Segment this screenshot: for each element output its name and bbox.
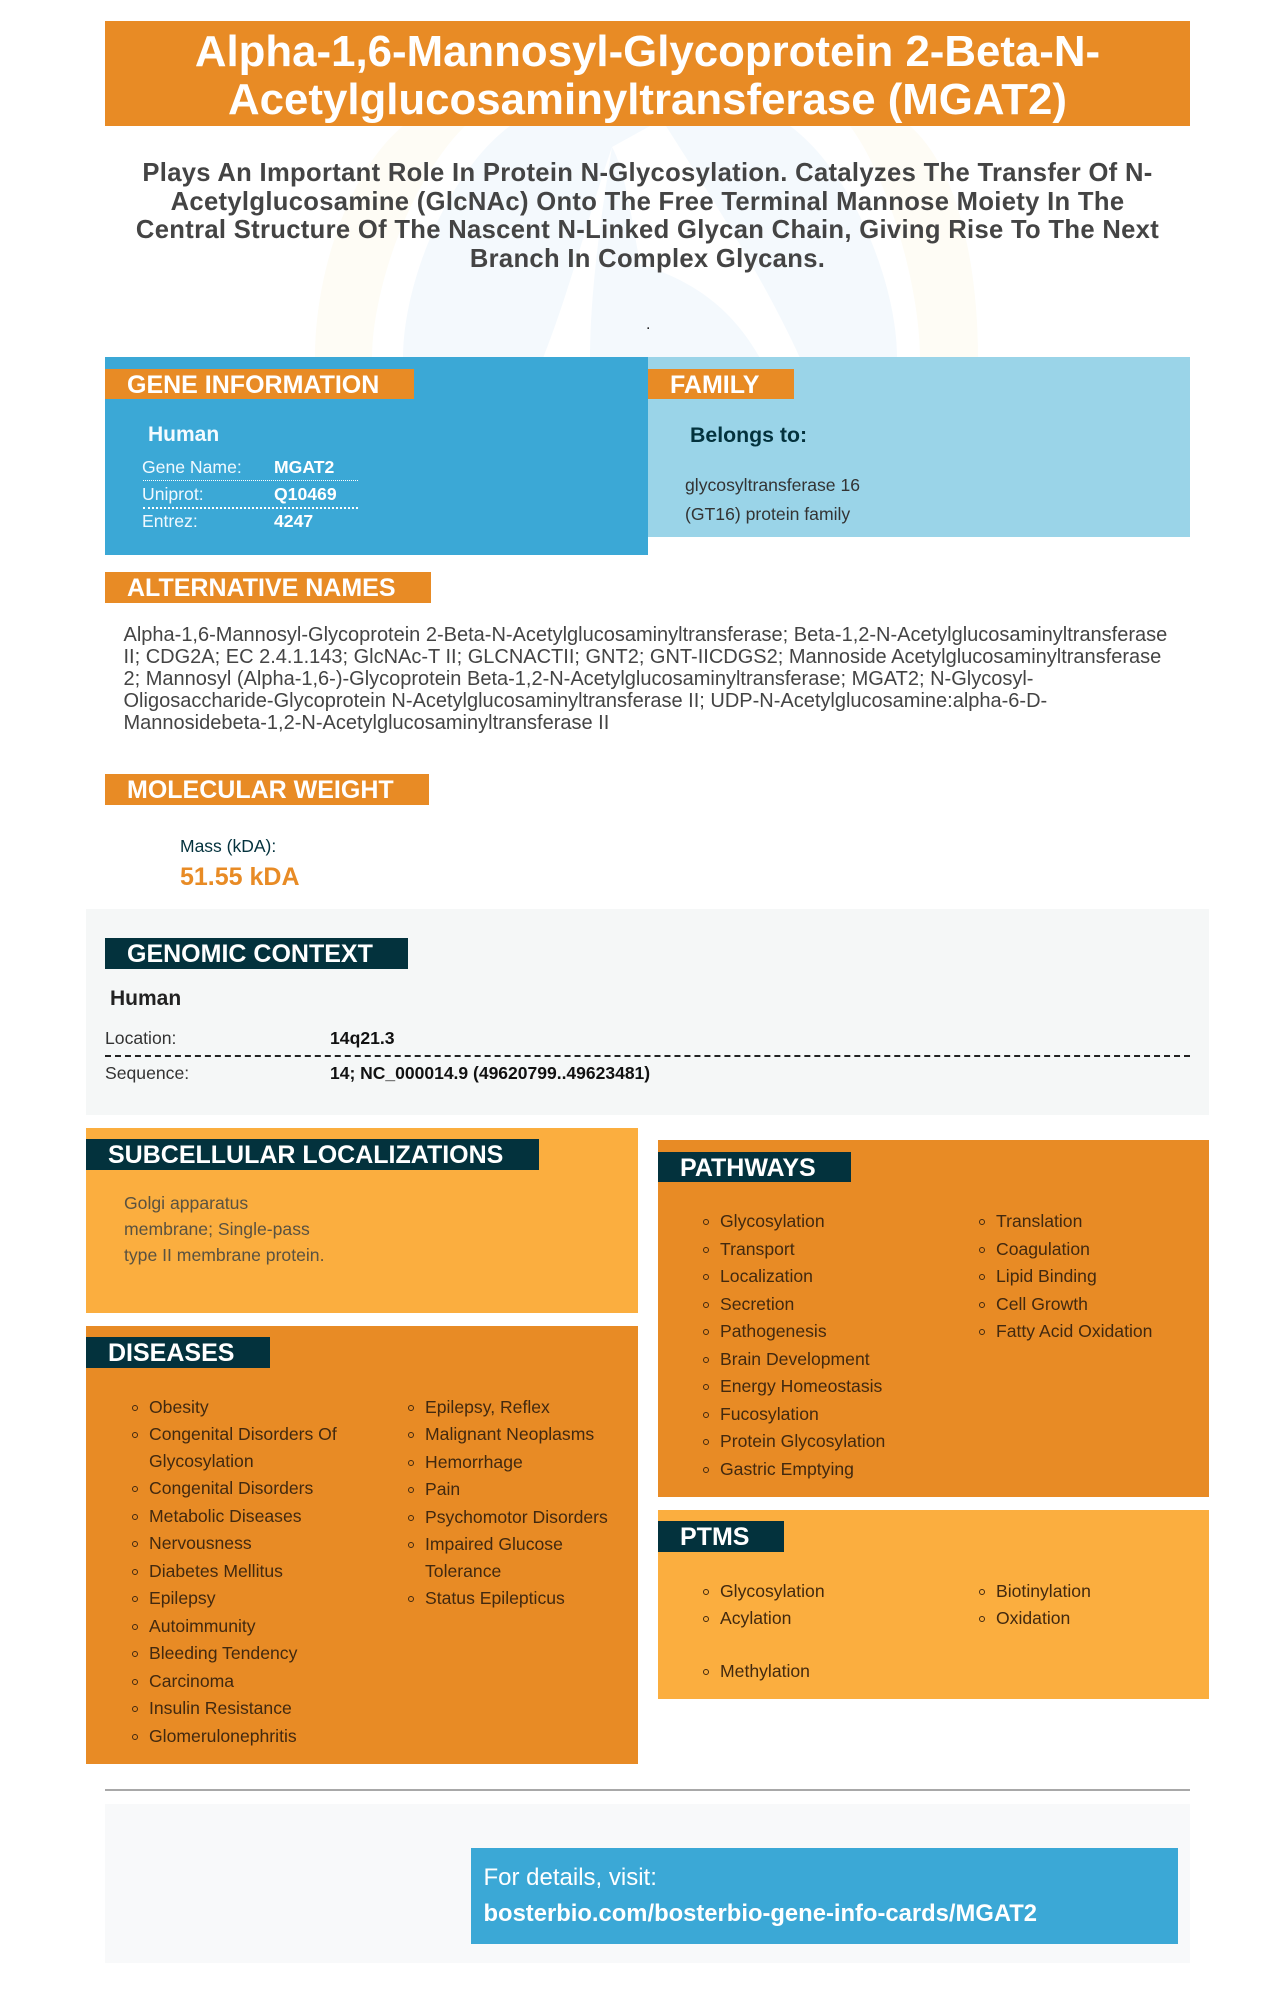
pathway list column 1: Pathogenesis (720, 1321, 827, 1341)
panel: diseases: Status Epilepticus (425, 1588, 565, 1608)
disease list column 1: Diabetes Mellitus (149, 1561, 283, 1581)
heading: diseases (86, 1337, 270, 1368)
disease list column 2: Pain (425, 1479, 460, 1499)
heading: pathways (658, 1152, 851, 1182)
ptm list column 2: Biotinylation (996, 1581, 1091, 1601)
panel: gene information (105, 357, 648, 555)
callout text: For details, visit: (484, 1864, 657, 1891)
dot: . (646, 316, 650, 333)
disease list column 1: Glycosylation (149, 1451, 254, 1471)
pathway list column 1: Transport (720, 1239, 795, 1259)
pathway list column 1: Secretion (720, 1294, 794, 1314)
family text (685, 475, 860, 524)
heading: subcellular localizations: SUBCELLULAR LOCALIZATIONS (108, 1141, 503, 1169)
disease list column 2: Tolerance (425, 1561, 501, 1581)
alternative names text: 2; Mannosyl (Alpha-1,6-)-Glycoprotein Beta-1,2-N-Acetylglucosaminyltransferase; MGAT2; N-Glycosyl- (124, 668, 1033, 690)
pathway list column 2: Fatty Acid Oxidation (996, 1321, 1152, 1341)
panel: genomic context: 14q21.3 (330, 1028, 395, 1048)
heading: ptms (658, 1521, 784, 1552)
pathway list column 1: Brain Development (720, 1349, 870, 1369)
disease list column 1: Insulin Resistance (149, 1698, 292, 1718)
pathway list column 2: Coagulation (996, 1239, 1090, 1259)
title banner: Alpha-1,6-Mannosyl-Glycoprotein 2-Beta-N- (195, 27, 1100, 76)
panel: genomic context: 14; NC_000014.9 (49620799..49623481) (330, 1063, 650, 1083)
ptm list column 2: Oxidation (996, 1608, 1070, 1628)
alternative names text: II; CDG2A; EC 2.4.1.143; GlcNAc-T II; GLCNACTII; GNT2; GNT-IICDGS2; Mannoside Acetylglucosaminyltransferase (124, 646, 1161, 668)
uniprot row: Uniprot: (142, 484, 204, 504)
disease list column 1: Obesity (149, 1397, 209, 1417)
callout url: bosterbio.com/bosterbio-gene-info-cards/MGAT2 (484, 1900, 1037, 1927)
disease list column 1: Bleeding Tendency (149, 1643, 297, 1663)
panel: genomic context (86, 909, 1209, 1115)
heading: pathways: PATHWAYS (680, 1154, 816, 1182)
disease list column 1: Congenital Disorders Of (149, 1424, 337, 1444)
panel: ptms (658, 1510, 1209, 1699)
heading: genomic context: GENOMIC CONTEXT (127, 940, 373, 968)
ptm list column 1: Acylation (720, 1608, 791, 1628)
subtitle description: Plays An Important Role In Protein N-Glycosylation. Catalyzes The Transfer Of N- (142, 159, 1153, 187)
belongs to label: Belongs to: (690, 423, 807, 447)
pathway list column 2: Translation (996, 1211, 1082, 1231)
location row: Location: (105, 1028, 176, 1048)
disease list column 2 (408, 1397, 608, 1608)
panel: subcellular localizations (86, 1128, 638, 1313)
disease list column 1: Metabolic Diseases (149, 1506, 302, 1526)
heading: diseases: DISEASES (108, 1339, 234, 1367)
pathway list column 1 (703, 1211, 885, 1479)
disease list column 2: Psychomotor Disorders (425, 1507, 608, 1527)
heading: molecular weight: MOLECULAR WEIGHT (127, 776, 394, 804)
alternative names text: Mannosidebeta-1,2-N-Acetylglucosaminyltransferase II (124, 712, 609, 734)
disease list column 1: Carcinoma (149, 1671, 234, 1691)
ptm list column 1: Methylation (720, 1661, 810, 1681)
panel: gene information: 4247 (274, 511, 313, 531)
ptm list column 2 (979, 1581, 1091, 1628)
panel: family (648, 357, 1190, 537)
heading: alternative names: ALTERNATIVE NAMES (127, 574, 396, 602)
subtitle description: Acetylglucosamine (GlcNAc) Onto The Free Terminal Mannose Moiety In The (171, 188, 1124, 216)
pathway list column 1: Localization (720, 1266, 813, 1286)
panel: diseases (86, 1326, 638, 1764)
gene name row: Gene Name: (142, 457, 242, 477)
pathway list column 1: Protein Glycosylation (720, 1431, 885, 1451)
localization text (124, 1193, 324, 1265)
heading: gene information: GENE INFORMATION (127, 371, 379, 399)
disease list column 2: Impaired Glucose (425, 1534, 563, 1554)
entrez row: Entrez: (142, 511, 198, 531)
pathway list column 1: Fucosylation (720, 1404, 819, 1424)
panel: footer (105, 1804, 1190, 1963)
alternative names text: Alpha-1,6-Mannosyl-Glycoprotein 2-Beta-N-Acetylglucosaminyltransferase; Beta-1,2-N-Acetylglucosaminyltransferase (124, 624, 1167, 646)
species label: Human (110, 987, 181, 1010)
pathway list column 2: Cell Growth (996, 1294, 1088, 1314)
panel: diseases: Glomerulonephritis (149, 1726, 297, 1746)
heading: ptms: PTMS (680, 1523, 749, 1551)
pathway list column 2: Lipid Binding (996, 1266, 1097, 1286)
alternative names text (124, 624, 1167, 734)
disease list column 1: Autoimmunity (149, 1616, 256, 1636)
mass value: 51.55 kDA (180, 863, 300, 891)
mass label: Mass (kDA): (180, 836, 276, 856)
localization text: Golgi apparatus (124, 1193, 248, 1213)
disease list column 1: Nervousness (149, 1533, 252, 1553)
localization text: membrane; Single-pass (124, 1219, 310, 1239)
panel: gene information: Q10469 (274, 484, 337, 504)
localization text: type II membrane protein. (124, 1245, 324, 1265)
subtitle description: Branch In Complex Glycans. (470, 244, 825, 272)
title banner: Acetylglucosaminyltransferase (MGAT2) (228, 75, 1067, 124)
disease list column 2: Malignant Neoplasms (425, 1424, 594, 1444)
title banner (105, 21, 1190, 126)
disease list column 2: Epilepsy, Reflex (425, 1397, 550, 1417)
disease list column 1: Congenital Disorders (149, 1478, 313, 1498)
subtitle description: Central Structure Of The Nascent N-Linked Glycan Chain, Giving Rise To The Next (136, 216, 1159, 244)
family text: (GT16) protein family (685, 504, 850, 524)
pathway list column 2 (979, 1211, 1152, 1341)
heading: family: FAMILY (670, 371, 759, 399)
subtitle description (136, 159, 1159, 272)
heading: family (648, 369, 794, 399)
callout: details link (471, 1848, 1178, 1944)
background watermark (315, 126, 978, 357)
family text: glycosyltransferase 16 (685, 475, 860, 495)
panel: gene information: MGAT2 (274, 457, 334, 477)
pathway list column 1: Gastric Emptying (720, 1459, 854, 1479)
pathway list column 1: Glycosylation (720, 1211, 825, 1231)
species label: Human (148, 423, 219, 446)
alternative names text: Oligosaccharide-Glycoprotein N-Acetylglucosaminyltransferase II; UDP-N-Acetylglucosamine:alpha-6-D- (124, 690, 1047, 712)
sequence row: Sequence: (105, 1063, 189, 1083)
ptm list column 1 (703, 1581, 825, 1681)
ptm list column 1: Glycosylation (720, 1581, 825, 1601)
pathway list column 1: Energy Homeostasis (720, 1376, 882, 1396)
disease list column 1: Epilepsy (149, 1588, 216, 1608)
panel: pathways (658, 1140, 1209, 1497)
disease list column 2: Hemorrhage (425, 1452, 523, 1472)
disease list column 1 (132, 1397, 337, 1746)
